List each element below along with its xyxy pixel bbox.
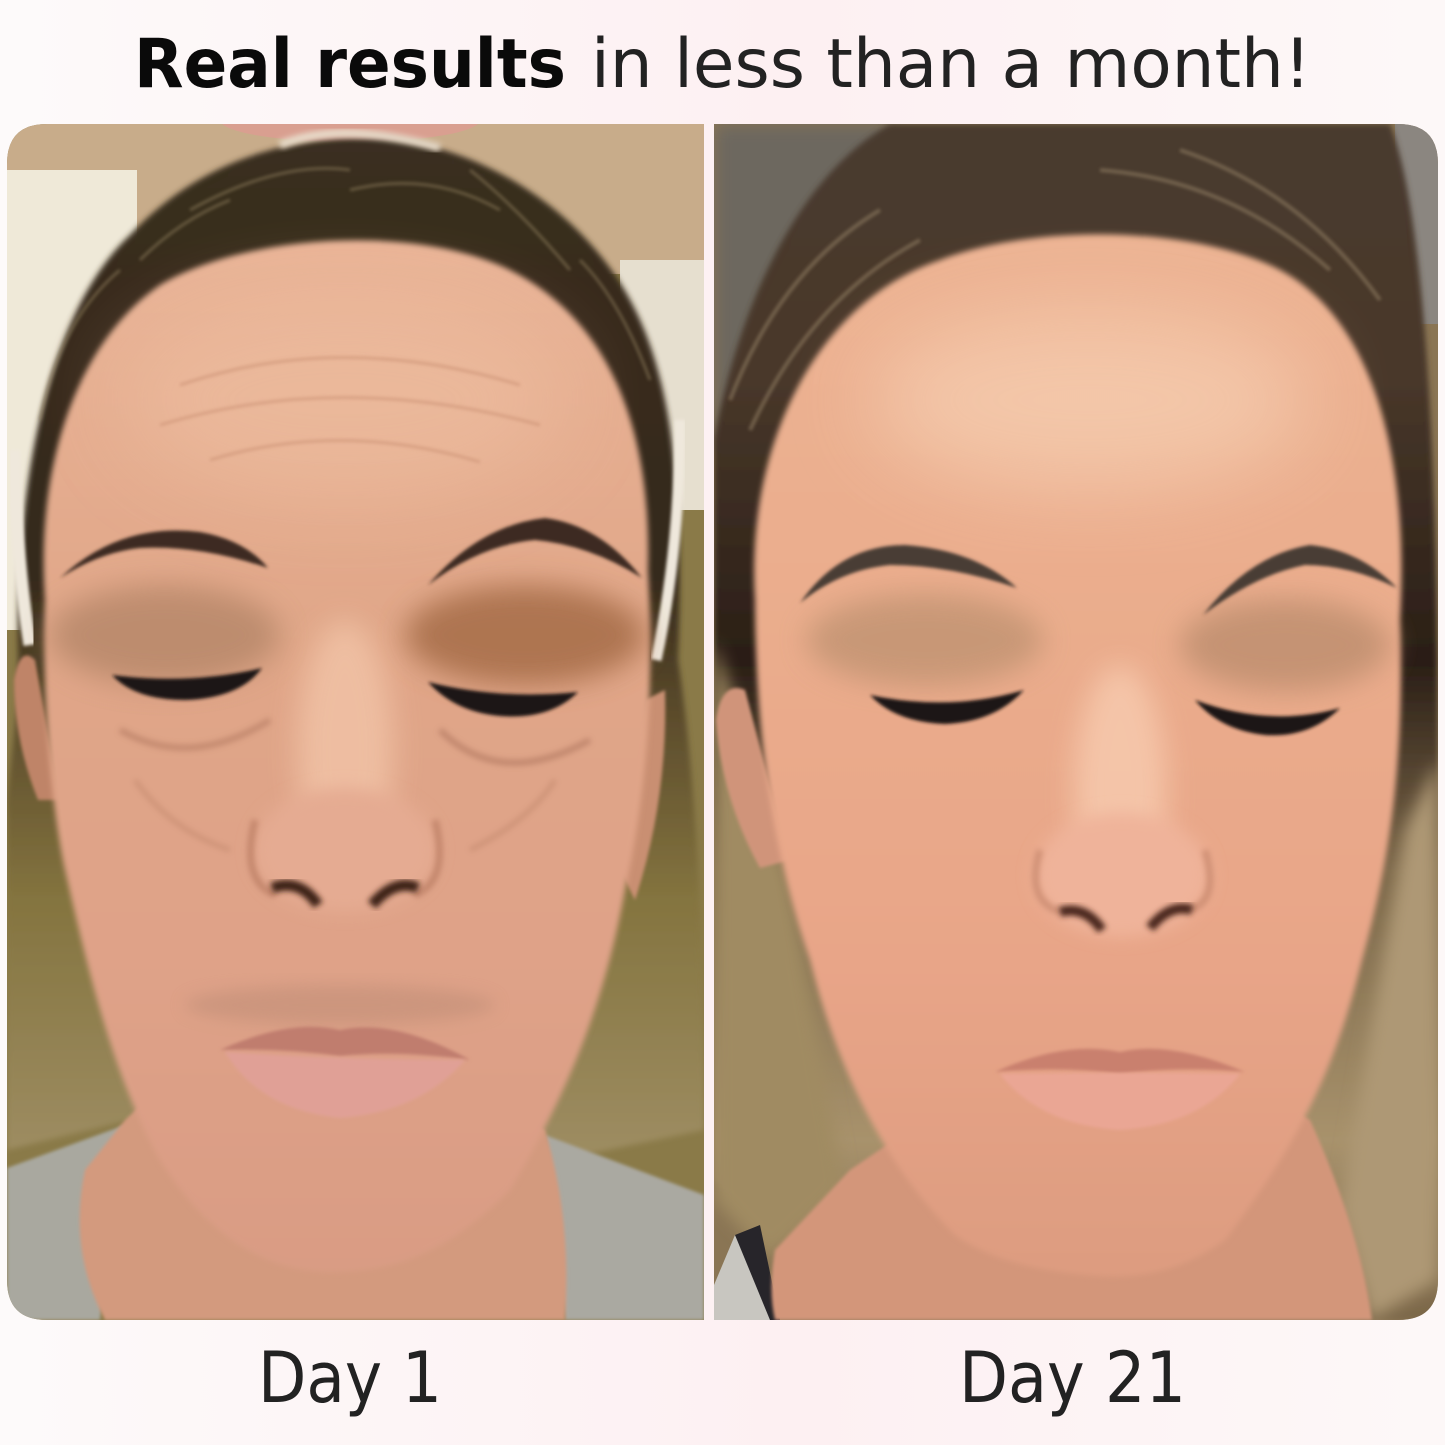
neck xyxy=(769,1116,1374,1320)
eyes xyxy=(870,690,1024,724)
title: in less than a month! xyxy=(591,25,1311,104)
eyebrows xyxy=(800,545,1017,603)
hair strands xyxy=(730,150,1380,430)
nose xyxy=(1074,665,1166,915)
forehead highlight xyxy=(870,310,1310,490)
shirt xyxy=(7,1125,125,1320)
nose xyxy=(291,619,399,795)
face xyxy=(754,234,1401,1276)
ears xyxy=(14,656,60,800)
neck xyxy=(78,1109,568,1320)
lips xyxy=(220,1027,470,1060)
lips xyxy=(995,1049,1245,1074)
title: Real results xyxy=(134,25,566,104)
eyes xyxy=(112,668,262,700)
forehead highlight xyxy=(186,371,504,470)
panel: day 21 photo xyxy=(714,124,1438,1320)
headband xyxy=(14,450,30,645)
eyebrows xyxy=(60,530,268,578)
face xyxy=(44,240,650,1272)
ear xyxy=(716,688,790,868)
eye shadows xyxy=(50,585,280,685)
forehead wrinkles xyxy=(160,358,540,462)
hair xyxy=(714,124,1438,1320)
hair strands xyxy=(40,168,650,420)
panel: day 1 photo xyxy=(7,98,704,1320)
top clothing xyxy=(714,1235,775,1320)
eye shadows xyxy=(807,594,1043,686)
under-eye bags xyxy=(120,720,270,748)
label: day 1: Day 1 xyxy=(258,1337,442,1419)
title xyxy=(134,25,1311,104)
hair xyxy=(7,138,704,1160)
label: day 21: Day 21 xyxy=(959,1337,1186,1419)
stubble xyxy=(185,985,495,1025)
